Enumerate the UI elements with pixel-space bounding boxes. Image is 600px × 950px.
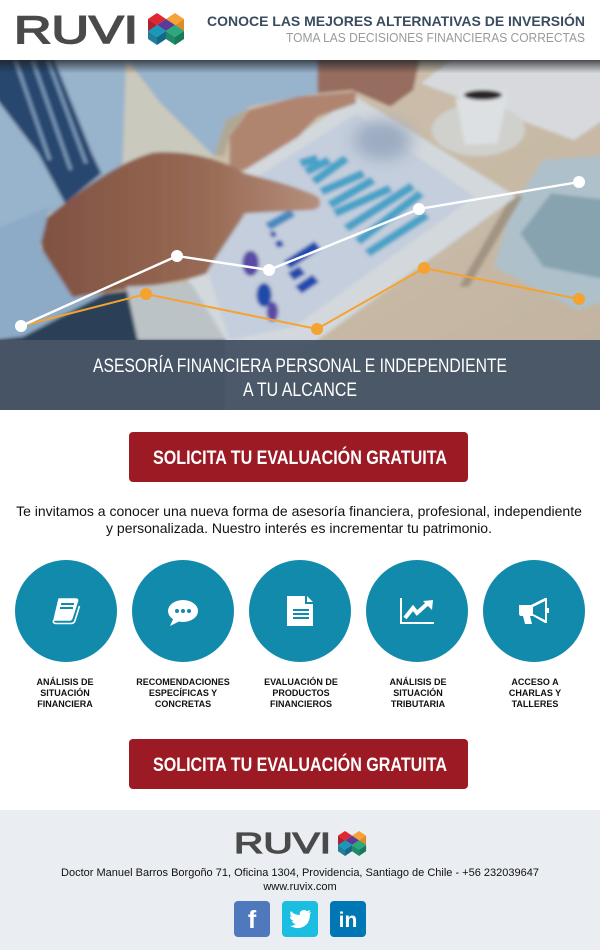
icon: facebook xyxy=(234,901,270,937)
service label: recommendations: ESPECÍFICAS Y xyxy=(149,688,217,698)
service label: product evaluation: EVALUACIÓN DE xyxy=(264,677,338,687)
intro paragraph: Te invitamos a conocer una nueva forma de asesoría financiera, profesional, independiente xyxy=(16,503,582,519)
footer logo xyxy=(234,828,366,858)
banner with hero headline: ASESORÍA FINANCIERA PERSONAL E INDEPENDIENTE xyxy=(93,356,507,377)
service label: product evaluation: FINANCIEROS xyxy=(270,699,332,709)
icon: linkedin xyxy=(330,901,366,937)
service label: recommendations: CONCRETAS xyxy=(155,699,211,709)
banner with hero headline: A TU ALCANCE xyxy=(243,380,357,401)
service label: recommendations xyxy=(136,677,230,709)
header xyxy=(0,0,600,60)
service label: product evaluation: PRODUCTOS xyxy=(272,688,330,698)
intro paragraph xyxy=(16,503,582,536)
service label: talks and workshops: ACCESO A xyxy=(511,677,559,687)
service label: talks and workshops xyxy=(509,677,561,709)
header headline: CONOCE LAS MEJORES ALTERNATIVAS DE INVERSIÓN xyxy=(207,12,585,29)
service label: financial analysis xyxy=(36,676,94,709)
icon: facebook: f xyxy=(248,906,257,934)
service: recommendations icon xyxy=(132,560,234,662)
service label: tax analysis: SITUACIÓN xyxy=(393,688,443,698)
service label: financial analysis: ANÁLISIS DE xyxy=(36,677,94,687)
icon: linkedin: in xyxy=(339,909,357,932)
service label: recommendations: RECOMENDACIONES xyxy=(136,677,230,687)
footer xyxy=(0,810,600,950)
footer address and website: www.ruvix.com xyxy=(263,881,337,893)
service label: tax analysis: TRIBUTARIA xyxy=(391,699,445,709)
icon: twitter xyxy=(282,901,318,937)
button: top CTA xyxy=(129,432,468,482)
hero photo with chart lines xyxy=(0,60,600,410)
service label: talks and workshops: CHARLAS Y xyxy=(509,688,561,698)
service: product evaluation icon xyxy=(249,560,351,662)
intro paragraph: y personalizada. Nuestro interés es incrementar tu patrimonio. xyxy=(106,520,492,536)
service: financial analysis icon xyxy=(15,560,117,662)
service label: talks and workshops: TALLERES xyxy=(512,699,558,709)
chart line: white xyxy=(15,176,585,332)
service label: financial analysis: FINANCIERA xyxy=(37,699,93,709)
service label: product evaluation xyxy=(264,676,338,709)
service: tax analysis icon xyxy=(366,560,468,662)
photo: hands holding tablet xyxy=(0,60,600,340)
banner with hero headline xyxy=(0,340,600,410)
logo: RUVI xyxy=(14,9,184,50)
footer address and website: Doctor Manuel Barros Borgoño 71, Oficina 1304, Providencia, Santiago de Chile - +56 232039647 xyxy=(61,867,539,879)
service label: tax analysis: ANÁLISIS DE xyxy=(389,677,446,687)
button: bottom CTA xyxy=(129,739,468,789)
footer address and website xyxy=(61,867,539,893)
service label: tax analysis xyxy=(389,676,446,709)
service label: financial analysis: SITUACIÓN xyxy=(40,688,90,698)
chart line: orange xyxy=(26,262,585,335)
service: talks and workshops icon xyxy=(483,560,585,662)
